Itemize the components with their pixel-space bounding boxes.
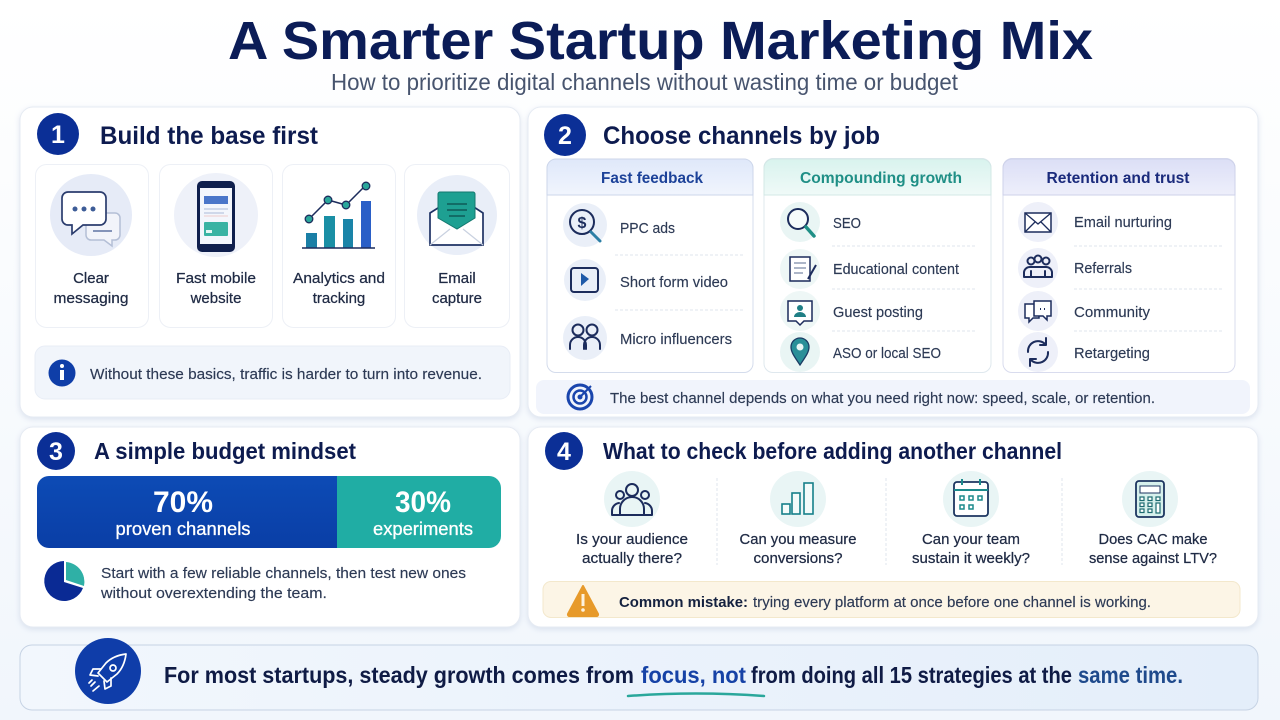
card: clear messaging: Clear [73, 270, 109, 287]
budget split bar: 70% [153, 486, 213, 519]
budget advice text: Start with a few reliable channels, then test new ones [101, 565, 466, 582]
item: guest posting [780, 291, 923, 331]
banner message: For most startups, steady growth comes from [164, 662, 634, 688]
callout: without these basics: Without these basics, traffic is harder to turn into revenue. [90, 366, 482, 383]
item: ASO or local SEO: ASO or local SEO [833, 345, 941, 362]
card: email capture: capture [432, 290, 482, 307]
check: conversions: conversions? [754, 550, 842, 567]
budget split bar: experiments [373, 519, 473, 539]
number badge 1 [37, 113, 79, 155]
icon: phone [197, 181, 235, 252]
item: short form video [564, 259, 728, 301]
card: analytics and tracking: Analytics and [293, 270, 385, 287]
item: email nurturing [1018, 202, 1172, 242]
check: audience: Is your audience [576, 531, 688, 548]
heading: what to check: What to check before adding another channel [603, 438, 1062, 464]
banner message: focus, not [641, 662, 746, 688]
callout: best channel depends: The best channel depends on what you need right now: speed, scale, or retention. [610, 390, 1155, 407]
item: micro influencers: Micro influencers [620, 331, 732, 348]
number badge 3 [37, 432, 75, 470]
item: educational content: Educational content [833, 261, 960, 278]
icon: target [568, 385, 592, 409]
budget split bar: 30% [395, 486, 451, 519]
card: analytics and tracking: tracking [313, 290, 365, 307]
underline accent [628, 694, 764, 696]
banner message [164, 662, 1183, 688]
icon: warning triangle [568, 586, 598, 616]
column: compounding growth [764, 158, 991, 372]
warning callout: Common mistake: [619, 594, 748, 611]
number badge 3: 3 [49, 438, 63, 466]
number badge 1: 1 [51, 121, 65, 149]
check: audience: actually there? [582, 550, 682, 567]
item: referrals: Referrals [1074, 260, 1132, 277]
warning callout [543, 582, 1240, 618]
budget advice text [100, 565, 466, 602]
card: fast mobile website [160, 164, 272, 328]
panel 4: what to check [528, 427, 1258, 627]
card: email capture: Email [438, 270, 476, 287]
callout: best channel depends [536, 380, 1250, 414]
item: educational content [780, 249, 960, 289]
banner message: same time. [1078, 662, 1183, 688]
title: A Smarter Startup Marketing Mix [228, 11, 1093, 71]
check: CAC vs LTV [1089, 471, 1217, 567]
budget split bar: proven channels [116, 519, 250, 539]
panel 3: a simple budget mindset [20, 427, 520, 627]
check: CAC vs LTV: sense against LTV? [1089, 550, 1217, 567]
icon: speech bubbles [62, 192, 120, 246]
item: email nurturing: Email nurturing [1074, 214, 1172, 231]
column: retention and trust: Retention and trust [1046, 170, 1190, 187]
item: community [1018, 291, 1150, 331]
item: SEO: SEO [833, 215, 861, 232]
icon: rocket [75, 638, 141, 704]
column: retention and trust [1003, 158, 1235, 372]
number badge 2 [544, 114, 586, 156]
item: referrals [1018, 248, 1132, 288]
number badge 4 [545, 432, 583, 470]
column: compounding growth: Compounding growth [800, 170, 962, 187]
icon: bar and line chart [302, 182, 375, 248]
check: sustain: Can your team [922, 531, 1020, 548]
heading: build the base first: Build the base first [100, 122, 319, 150]
banner message: from doing all 15 strategies at the [751, 662, 1072, 688]
card: fast mobile website: Fast mobile [176, 270, 256, 287]
check: conversions [740, 471, 856, 567]
budget advice text: without overextending the team. [100, 585, 327, 602]
check: audience [576, 471, 688, 567]
panel 1: build the base first [20, 107, 520, 417]
bottom banner [20, 638, 1258, 710]
panel 2: choose channels by job [528, 107, 1258, 417]
card: clear messaging [36, 164, 148, 328]
card: analytics and tracking [282, 164, 396, 328]
item: PPC ads: $ [578, 215, 587, 232]
item: ASO or local SEO [780, 332, 941, 372]
card: clear messaging: messaging [54, 290, 128, 307]
check: sustain: sustain it weekly? [912, 550, 1030, 567]
icon: info [48, 360, 76, 386]
check: sustain [912, 471, 1030, 567]
icon: envelope [430, 192, 483, 245]
budget split bar [37, 476, 501, 548]
item: guest posting: Guest posting [833, 304, 923, 321]
column: fast feedback [547, 159, 753, 372]
check: CAC vs LTV: Does CAC make [1098, 531, 1208, 548]
subtitle: How to prioritize digital channels without wasting time or budget [331, 69, 959, 95]
item: retargeting [1018, 332, 1150, 372]
item: community: Community [1074, 304, 1150, 321]
heading: a simple budget mindset: A simple budget mindset [94, 438, 356, 464]
item: short form video: Short form video [620, 274, 728, 291]
warning callout: trying every platform at once before one channel is working. [753, 594, 1151, 611]
number badge 2: 2 [558, 122, 572, 150]
item: retargeting: Retargeting [1074, 345, 1150, 362]
number badge 4: 4 [557, 438, 571, 466]
callout: without these basics [35, 346, 510, 399]
card: email capture [404, 164, 510, 328]
item: SEO [780, 202, 861, 242]
heading: choose channels by job: Choose channels by job [603, 122, 880, 150]
item: PPC ads: PPC ads [620, 220, 675, 237]
column: fast feedback: Fast feedback [601, 170, 703, 187]
item: PPC ads [563, 203, 675, 247]
icon: pie chart [44, 561, 84, 601]
check: conversions: Can you measure [740, 531, 856, 548]
item: micro influencers [563, 316, 732, 360]
card: fast mobile website: website [190, 290, 241, 307]
